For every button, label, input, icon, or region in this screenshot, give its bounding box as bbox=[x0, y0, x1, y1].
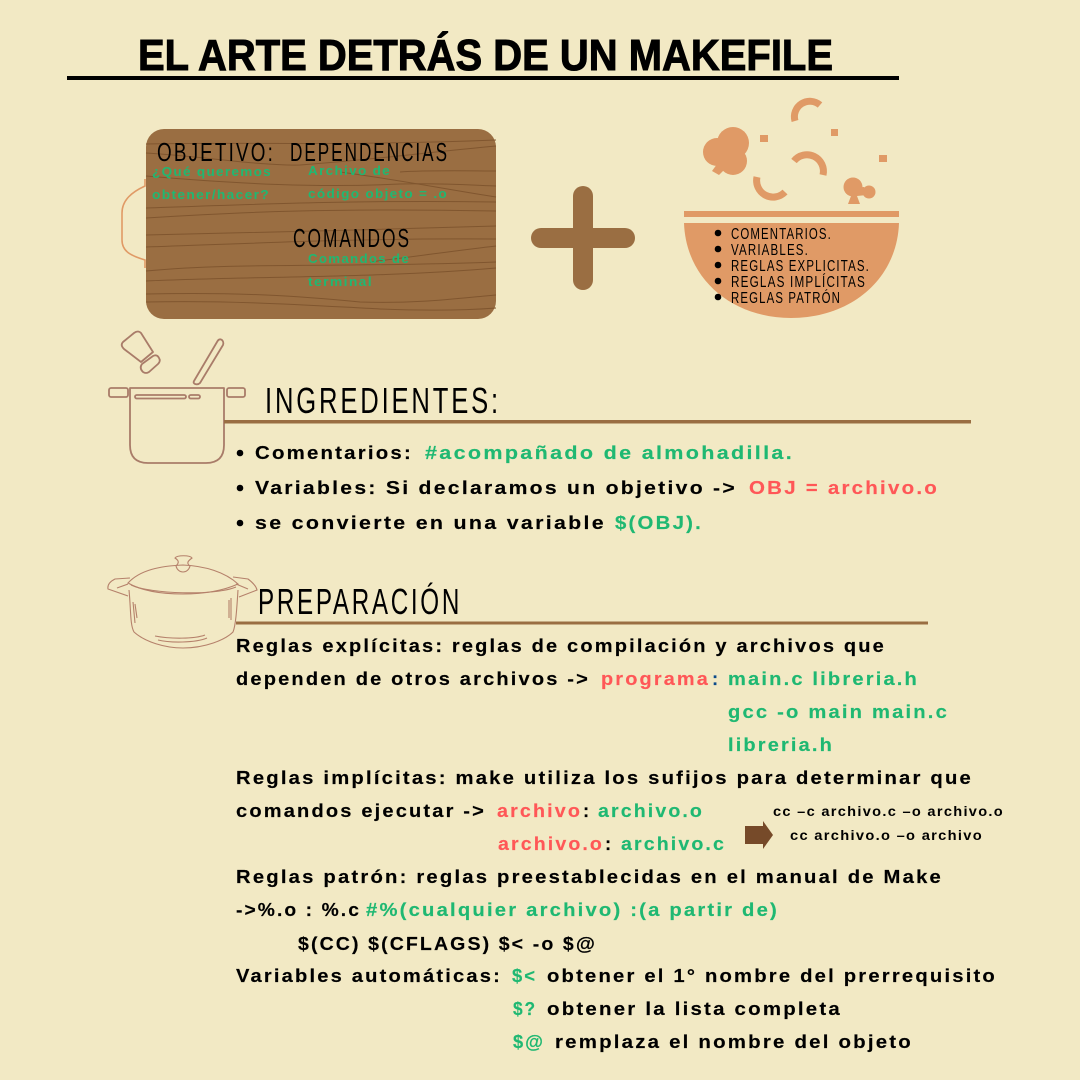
text: reglas explicitas: Reglas explícitas: reglas de compilación y archivos que bbox=[236, 635, 886, 656]
text: dependencias description bbox=[308, 164, 448, 201]
text: reglas implicitas: Reglas implícitas: make utiliza los sufijos para determinar que bbox=[236, 767, 973, 788]
heading: preparacion: PREPARACIÓN bbox=[258, 581, 462, 622]
text: reglas explicitas: programa bbox=[601, 668, 710, 689]
list: bowl contents: REGLAS IMPLÍCITAS bbox=[731, 272, 866, 291]
list: ingredients bbox=[237, 442, 939, 533]
list: bowl contents bbox=[715, 226, 870, 307]
list: bowl contents: VARIABLES. bbox=[731, 242, 809, 259]
heading: comandos: COMANDOS bbox=[293, 223, 411, 253]
text: dependencias description: código objeto = .o bbox=[308, 187, 448, 201]
text: implicit commands: cc –c archivo.c –o archivo.o bbox=[773, 804, 1004, 819]
text: dependencias description: Archivo de bbox=[308, 164, 391, 178]
wood board bbox=[146, 129, 496, 319]
list: bowl contents: COMENTARIOS. bbox=[731, 226, 832, 243]
list: bowl contents: REGLAS EXPLICITAS. bbox=[731, 258, 870, 275]
text: reglas implicitas: archivo.o bbox=[598, 800, 704, 821]
icon: ingredients falling into bowl bbox=[703, 101, 887, 204]
panel: cutting board recipe structure bbox=[122, 129, 496, 319]
text: variables automaticas bbox=[236, 965, 997, 1052]
text: reglas implicitas: archivo.o bbox=[498, 833, 604, 854]
bowl rim bbox=[684, 211, 899, 217]
list: ingredients: Variables: Si declaramos un objetivo -> bbox=[255, 477, 737, 498]
text: comandos description: Comandos de bbox=[308, 252, 410, 266]
text: implicit commands: cc archivo.o –o archivo bbox=[790, 828, 983, 843]
list: ingredients: #acompañado de almohadilla. bbox=[425, 442, 794, 463]
text: reglas implicitas: : bbox=[583, 800, 591, 821]
text: reglas implicitas: : bbox=[605, 833, 613, 854]
list: bowl contents: REGLAS PATRÓN bbox=[731, 288, 841, 307]
text: comandos description bbox=[308, 252, 410, 289]
icon: plus sign bbox=[531, 186, 635, 290]
text: reglas patron: Reglas patrón: reglas preestablecidas en el manual de Make bbox=[236, 866, 943, 887]
text: variables automaticas: obtener el 1° nombre del prerrequisito bbox=[547, 965, 997, 986]
heading: dependencias: DEPENDENCIAS bbox=[290, 137, 449, 167]
section: preparacion bbox=[108, 556, 1004, 1052]
list: ingredients: se convierte en una variable bbox=[255, 512, 606, 533]
text: reglas implicitas: comandos ejecutar -> bbox=[236, 800, 486, 821]
text: reglas explicitas: dependen de otros archivos -> bbox=[236, 668, 590, 689]
panel: bowl with contents list bbox=[684, 101, 899, 318]
text: objetivo description: obtener/hacer? bbox=[152, 188, 270, 202]
icon: cooking pot with lid bbox=[108, 556, 257, 648]
text: reglas explicitas: libreria.h bbox=[728, 734, 834, 755]
text: variables automaticas: $? bbox=[513, 998, 537, 1019]
text: reglas explicitas bbox=[236, 635, 949, 755]
text: variables automaticas: $< bbox=[512, 965, 537, 986]
text: reglas patron bbox=[236, 866, 943, 954]
text: reglas implicitas: archivo.c bbox=[621, 833, 726, 854]
bowl body bbox=[684, 223, 899, 318]
heading underline bbox=[224, 420, 971, 424]
icon: arrow to commands bbox=[745, 821, 773, 849]
text: variables automaticas: Variables automáticas: bbox=[236, 965, 502, 986]
list: ingredients: Comentarios: bbox=[255, 442, 413, 463]
text: variables automaticas: obtener la lista completa bbox=[547, 998, 842, 1019]
section: ingredientes bbox=[109, 332, 971, 533]
title: EL ARTE DETRÁS DE UN MAKEFILE bbox=[138, 30, 833, 80]
heading: ingredientes: INGREDIENTES: bbox=[265, 380, 501, 421]
text: reglas implicitas: archivo bbox=[497, 800, 582, 821]
text: variables automaticas: remplaza el nombre del objeto bbox=[555, 1031, 913, 1052]
text: reglas patron: ->%.o : %.c bbox=[236, 899, 361, 920]
text: implicit commands bbox=[773, 804, 1004, 843]
text: variables automaticas: $@ bbox=[513, 1031, 545, 1052]
heading: objetivo: OBJETIVO: bbox=[157, 137, 275, 167]
text: reglas patron: $(CC) $(CFLAGS) $< -o $@ bbox=[298, 933, 597, 954]
text: reglas implicitas bbox=[236, 767, 973, 854]
list: ingredients: OBJ = archivo.o bbox=[749, 477, 939, 498]
text: reglas patron: #%(cualquier archivo) :(a partir de) bbox=[366, 899, 779, 920]
text: reglas explicitas: : bbox=[712, 668, 720, 689]
list: ingredients: $(OBJ). bbox=[615, 512, 703, 533]
text: reglas explicitas: gcc -o main main.c bbox=[728, 701, 949, 722]
icon: pot with salt shaker and stick bbox=[109, 332, 245, 463]
text: objetivo description: ¿Qué queremos bbox=[152, 165, 272, 179]
text: comandos description: terminal bbox=[308, 275, 373, 289]
text: reglas explicitas: main.c libreria.h bbox=[728, 668, 919, 689]
text: objetivo description bbox=[152, 165, 272, 202]
heading underline bbox=[236, 622, 928, 624]
icon: board handle bbox=[122, 179, 145, 268]
